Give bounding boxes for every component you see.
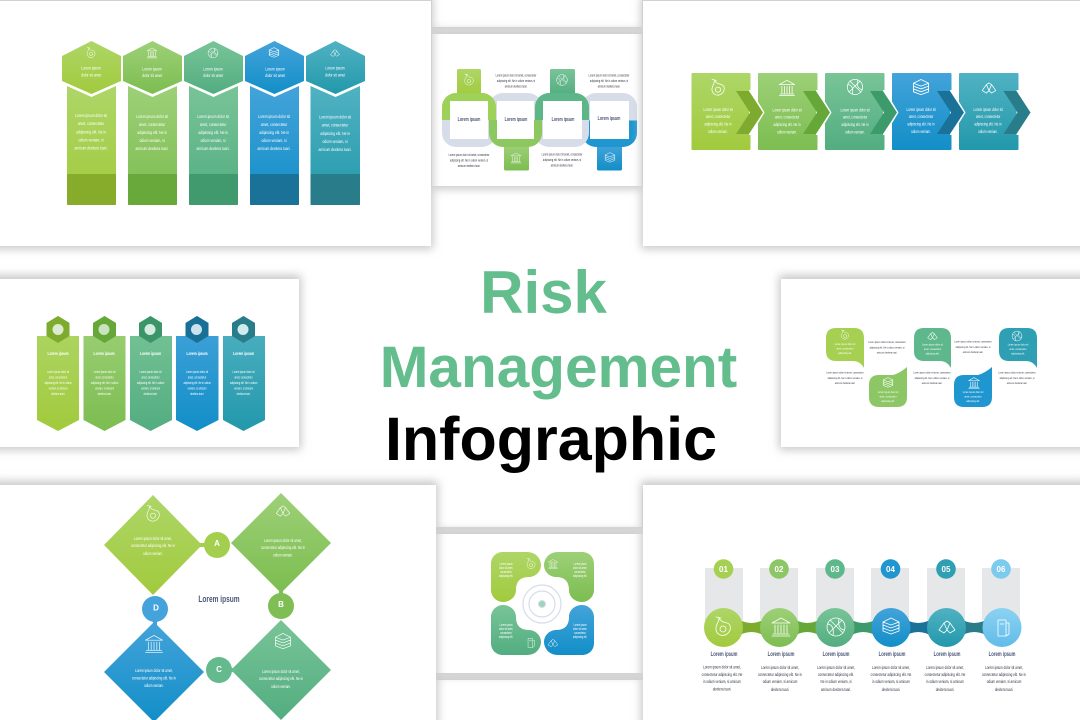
captions: Lorem ipsum dolor sit amet, consectetur [589, 73, 629, 78]
title: Risk [480, 259, 607, 326]
box 4: amet, consectetur [909, 115, 934, 119]
petal: top right: Lorem ipsum [574, 562, 587, 566]
column 2: amet, consectetur [139, 121, 166, 127]
captions: adipiscing elit. Ne in odium veniam, si [956, 345, 991, 349]
bubble 5: amet, consectetur [1009, 347, 1027, 351]
banner 2: veniam, si amicum [95, 386, 115, 391]
banner 5: Lorem ipsum [233, 350, 254, 356]
bubble 1: amet, consectetur [836, 346, 854, 351]
diamond 3 with circle C: consectetur adipiscing elit. Ne in [259, 677, 303, 681]
column 2 [123, 41, 182, 205]
column 3: adipiscing elit. Ne in [198, 129, 229, 135]
column 2: dolor sit amet [142, 72, 163, 78]
bubble 4: adipiscing elit. [966, 399, 980, 403]
title: Infographic [385, 405, 717, 473]
step 05: consectetur adipiscing elit. Ne [925, 673, 965, 677]
captions: amicum dexitera tuari. [963, 350, 984, 354]
column 1: odium veniam, si [78, 137, 104, 143]
banner 5: adipiscing elit. Ne in odium [230, 381, 258, 385]
box 4: adipiscing elit. Ne in [907, 122, 935, 127]
box 2: odium veniam. [777, 130, 797, 135]
bubble 5: adipiscing elit. [1011, 351, 1025, 356]
step 01: Lorem ipsum dolor sit amet, [703, 665, 741, 670]
step 03: Lorem ipsum dolor sit amet, [817, 666, 855, 670]
captions: amicum dexitera tuari. [598, 84, 620, 89]
step 05: Lorem ipsum dolor sit amet, [926, 666, 964, 670]
captions: amicum dexitera tuari. [1007, 381, 1028, 385]
step 04: in odium veniam, si amicum [872, 680, 910, 684]
column 5: amet, consectetur [322, 122, 349, 128]
box 3: Lorem ipsum dolor sit [841, 108, 871, 113]
column 1: Lorem ipsum dolor sit [75, 112, 108, 118]
diamond 2 with circle B: Lorem ipsum dolor sit amet, [264, 539, 302, 543]
banner 4: Lorem ipsum dolor sit [186, 370, 208, 374]
captions: Lorem ipsum dolor sit amet, consectetur [913, 370, 951, 375]
captions: adipiscing elit. Ne in odium veniam, si [543, 158, 581, 162]
banner 3: dexitera tuari. [144, 392, 158, 396]
captions: amicum dexitera tuari. [835, 381, 856, 385]
captions: Lorem ipsum dolor sit amet, consectetur [954, 339, 992, 344]
column 4: amicum dexitera tuari. [258, 145, 290, 151]
step 04: consectetur adipiscing elit. Ne [871, 673, 911, 677]
centre heading: Lorem ipsum [198, 594, 240, 604]
step 05: dexitera tuari. [936, 688, 954, 692]
step 02: Lorem ipsum [768, 651, 795, 658]
box 2: Lorem ipsum dolor sit [773, 108, 803, 113]
step 01 [702, 559, 743, 692]
column 1: adipiscing elit. Ne in [76, 129, 107, 135]
box 5: odium veniam. [978, 130, 998, 134]
petal: bottom right: adipiscing elit. [573, 635, 587, 639]
captions: adipiscing elit. Ne in odium veniam, si [870, 345, 905, 350]
step 02: consectetur adipiscing elit. Ne in [758, 673, 802, 677]
tab: first [457, 69, 481, 95]
diamond 3 with circle C: Lorem ipsum dolor sit amet, [262, 670, 300, 674]
box 5: Lorem ipsum dolor sit [974, 108, 1004, 112]
target rings [523, 585, 561, 623]
banner 3: Lorem ipsum dolor sit [140, 370, 162, 374]
square: third: Lorem ipsum [552, 116, 574, 122]
step 01: consectetur adipiscing elit. Ne [702, 673, 742, 677]
petal: top right: consectetur [574, 570, 586, 574]
diamond 1 with circle A: Lorem ipsum dolor sit amet, [134, 537, 172, 541]
step 05 [925, 559, 966, 692]
step 06: odium veniam, si amicum [987, 680, 1021, 684]
captions: amicum dexitera tuari. [458, 164, 480, 168]
panel: banners [0, 275, 301, 450]
step 01: in odium veniam, si amicum [703, 680, 741, 684]
captions: Lorem ipsum dolor sit amet, consectetur [449, 153, 489, 157]
step 02: Lorem ipsum dolor sit amet, [761, 666, 799, 670]
box 1: adipiscing elit. Ne in [704, 122, 732, 127]
step 06: Lorem ipsum dolor sit amet, [985, 666, 1023, 670]
banner 1: Lorem ipsum [48, 350, 69, 356]
captions: Lorem ipsum dolor sit amet, consectetur [998, 370, 1036, 375]
column 3: amicum dexitera tuari. [197, 145, 229, 151]
banner 4 [176, 316, 218, 431]
box 4 [892, 73, 966, 150]
banner 4: dexitera tuari. [190, 392, 204, 396]
banner 2: dexitera tuari. [98, 392, 112, 396]
panel: numbered timeline [641, 481, 1080, 720]
banner 2: Lorem ipsum [94, 350, 115, 356]
panel: diamonds [0, 481, 438, 720]
bubble 5 [999, 328, 1037, 368]
box 1: Lorem ipsum dolor sit [704, 108, 734, 112]
bubble 1 [826, 328, 864, 368]
petal: bottom left [491, 605, 541, 655]
captions: adipiscing elit. Ne in odium veniam, si [828, 376, 863, 380]
banner 3 [130, 316, 172, 431]
petal: top left: adipiscing elit. [499, 574, 513, 578]
banner 1: dexitera tuari. [51, 392, 65, 396]
column 4: odium veniam, si [261, 137, 287, 143]
step 06: consectetur adipiscing elit. Ne in [982, 673, 1026, 677]
column 5: amicum dexitera tuari. [319, 146, 351, 152]
bubble 1: Lorem ipsum dolor sit [835, 342, 856, 346]
captions: amicum dexitera tuari. [922, 381, 943, 385]
step 06 [982, 559, 1026, 692]
column 3: Lorem ipsum dolor sit [197, 113, 230, 119]
column 5: odium veniam, si [322, 138, 348, 144]
panel: band above petal diagram [430, 480, 644, 530]
step 04: dexitera tuari. [882, 688, 900, 692]
connectors [735, 617, 991, 638]
petal: top left: Lorem ipsum [500, 562, 513, 566]
step 05: 05 [942, 565, 951, 574]
diamond 2 with circle B [231, 493, 331, 619]
column 5: adipiscing elit. Ne in [320, 130, 351, 136]
step 06: 06 [997, 565, 1006, 574]
square: first: Lorem ipsum [458, 116, 480, 122]
petal: top right: dolor sit amet, [573, 566, 587, 570]
step 01: 01 [719, 565, 728, 574]
column 2: amicum dexitera tuari. [136, 145, 168, 151]
banner 4: amet, consectetur [188, 375, 206, 380]
column 5 [306, 41, 365, 205]
box 3: odium veniam. [845, 130, 865, 135]
step 04 [871, 559, 911, 692]
petal: top left [491, 552, 541, 602]
petal: top right: adipiscing elit. [573, 574, 587, 578]
captions: Lorem ipsum dolor sit amet, consectetur [496, 73, 536, 78]
step 03: Ne in odium veniam, si [821, 680, 852, 684]
petal: bottom right: consectetur [574, 631, 586, 635]
step 03 [816, 559, 855, 692]
bubble 3: adipiscing elit. [926, 351, 940, 356]
panel: speech bubbles [779, 275, 1080, 450]
banner 3: adipiscing elit. Ne in odium [137, 381, 165, 385]
diamond 4 with circle D: odium veniam. [144, 684, 164, 688]
banner 5 [223, 316, 265, 431]
column 2: odium veniam, si [139, 137, 165, 143]
bubble 3: Lorem ipsum dolor sit [922, 342, 943, 347]
bubble 3: amet, consectetur [924, 347, 941, 351]
petal: top right [544, 552, 594, 602]
column 3: odium veniam, si [200, 137, 226, 143]
column 4: Lorem ipsum dolor sit [258, 113, 291, 119]
column 1: Lorem ipsum [81, 65, 101, 71]
banner 2: adipiscing elit. Ne in odium [91, 381, 119, 385]
box 2: adipiscing elit. Ne in [773, 123, 801, 127]
step 04: 04 [886, 565, 895, 574]
diamond 2 with circle B: B [278, 600, 284, 609]
column 2: Lorem ipsum dolor sit [136, 113, 169, 119]
square: third [535, 93, 589, 147]
diamond 1 with circle A: A [214, 539, 220, 548]
diamond 3 with circle C: C [216, 665, 222, 674]
box 3: amet, consectetur [843, 115, 868, 120]
captions: amicum dexitera tuari. [551, 163, 573, 168]
box 4: odium veniam. [911, 130, 931, 134]
diamond 1 with circle A: odium veniam. [143, 552, 163, 556]
column 3: Lorem ipsum [203, 66, 223, 72]
banner 4: veniam, si amicum [188, 386, 207, 391]
captions: adipiscing elit. Ne in odium veniam, si [915, 376, 950, 380]
diamond 1 with circle A: consectetur adipiscing elit. Ne in [131, 544, 175, 548]
square: fourth: Lorem ipsum [598, 115, 620, 121]
bubble 2 [869, 367, 907, 407]
column 1: amicum dexitera tuari. [75, 145, 107, 151]
box 1: odium veniam. [708, 130, 728, 134]
bubble 2: Lorem ipsum dolor sit [878, 390, 899, 394]
bubble 4: amet, consectetur [964, 394, 982, 399]
step 02: odium veniam, si amicum [763, 680, 797, 684]
column 4: amet, consectetur [261, 121, 288, 127]
banner 1: Lorem ipsum dolor sit [47, 370, 69, 374]
captions [449, 73, 629, 168]
banner 2 [84, 316, 126, 431]
tab: third [550, 69, 575, 95]
panel: petal diagram [434, 530, 644, 676]
box 2 [758, 73, 832, 150]
petal: bottom left: consectetur [500, 631, 512, 635]
petal: bottom right: dolor sit amet, [573, 627, 587, 631]
bubble 2: adipiscing elit. [881, 399, 895, 403]
step 04: Lorem ipsum [879, 651, 906, 658]
captions: adipiscing elit. Ne in odium veniam, si [450, 158, 488, 163]
banner 5: amet, consectetur [234, 375, 253, 380]
column 4: dolor sit amet [265, 72, 286, 78]
captions: adipiscing elit. Ne in odium veniam, si [590, 79, 628, 83]
box 2: amet, consectetur [775, 115, 800, 120]
captions: amicum dexitera tuari. [505, 84, 527, 89]
column 3 [184, 41, 243, 205]
column 3: dolor sit amet [203, 72, 224, 78]
grey ring: second [489, 93, 542, 147]
column 5: Lorem ipsum [325, 65, 345, 71]
banner 2: amet, consectetur [95, 375, 114, 380]
column 5: Lorem ipsum dolor sit [319, 114, 352, 120]
column 1: amet, consectetur [78, 120, 105, 126]
bubble 1: adipiscing elit. [838, 351, 852, 355]
diamond 1 with circle A [104, 495, 230, 595]
captions: adipiscing elit. Ne in odium veniam, si [1000, 376, 1035, 380]
column 3: amet, consectetur [200, 121, 227, 127]
banner 2: Lorem ipsum dolor sit [94, 370, 116, 374]
banner 5: dexitera tuari. [237, 392, 251, 396]
diamond 4 with circle D [104, 596, 204, 720]
step 02: dexitera tuari. [771, 688, 789, 692]
step 01: Lorem ipsum [711, 651, 738, 658]
column 4: Lorem ipsum [265, 66, 285, 72]
column 2: adipiscing elit. Ne in [137, 129, 168, 135]
banner 5: veniam, si amicum [234, 386, 254, 391]
diamond 4 with circle D: consectetur adipiscing elit. Ne in [132, 676, 176, 681]
box 1 [692, 73, 764, 150]
diamond 4 with circle D: D [153, 604, 159, 612]
column 1: dolor sit amet [81, 72, 102, 78]
banner 5: Lorem ipsum dolor sit [233, 370, 255, 374]
diamond 3 with circle C [206, 620, 331, 720]
captions: amicum dexitera tuari. [877, 350, 898, 355]
banner 3: Lorem ipsum [140, 350, 161, 356]
diamond 4 with circle D: Lorem ipsum dolor sit amet, [135, 669, 173, 673]
diamond 2 with circle B: consectetur adipiscing elit. Ne in [261, 546, 305, 550]
banner 1 [37, 316, 79, 431]
panel: bottom middle strip [430, 676, 644, 720]
petal: bottom left: Lorem ipsum [500, 623, 513, 627]
petal: bottom right: Lorem ipsum [574, 623, 587, 627]
step 06: Lorem ipsum [989, 651, 1016, 658]
title: Management [380, 335, 737, 400]
step 02 [758, 559, 802, 692]
square: first [442, 93, 496, 147]
captions: Lorem ipsum dolor sit amet, consectetur [826, 370, 864, 375]
banner 4: Lorem ipsum [187, 350, 208, 356]
step 05: Lorem ipsum [934, 651, 961, 658]
diamond 3 with circle C: odium veniam. [271, 685, 291, 689]
banner 1: adipiscing elit. Ne in odium [44, 381, 72, 385]
column 4 [245, 41, 304, 205]
square: second: Lorem ipsum [505, 116, 527, 122]
step 01: dexitera tuari. [713, 687, 731, 692]
petal: bottom left: dolor sit amet, [499, 627, 513, 631]
column 4: adipiscing elit. Ne in [259, 129, 290, 135]
bubble 4 [954, 367, 992, 407]
bubble 5: Lorem ipsum dolor sit [1008, 342, 1029, 347]
tab: second [504, 145, 529, 170]
step 05: in odium veniam, si amicum [926, 680, 964, 684]
step 06: dexitera tuari. [995, 688, 1013, 692]
square: fourth [582, 93, 637, 147]
petal: top left: consectetur [500, 570, 512, 574]
box 5 [959, 73, 1030, 150]
banner 3: veniam, si amicum [141, 386, 161, 391]
box 3 [825, 73, 898, 150]
petal: bottom left: adipiscing elit. [499, 635, 513, 639]
banner 1: veniam, si amicum [49, 386, 68, 391]
column 5: dolor sit amet [325, 72, 346, 78]
panel: hexagon columns [0, 0, 433, 249]
banner 1: amet, consectetur [49, 375, 67, 380]
step 03: 03 [831, 565, 840, 574]
column 1 [62, 41, 121, 205]
box 5: adipiscing elit. Ne in [974, 122, 1002, 127]
box 3: adipiscing elit. Ne in [841, 123, 869, 127]
panel: chevron boxes [641, 0, 1080, 249]
step 04: Lorem ipsum dolor sit amet, [872, 666, 910, 670]
box 1: amet, consectetur [706, 115, 731, 119]
captions: Lorem ipsum dolor sit amet, consectetur [542, 152, 582, 157]
captions [826, 339, 1036, 385]
bubble 3 [914, 328, 951, 368]
diamond 2 with circle B: odium veniam. [273, 553, 293, 558]
square: second [489, 101, 542, 147]
step 03: amicum dexitera tuari. [821, 688, 851, 692]
captions: adipiscing elit. Ne in odium veniam, si [497, 79, 535, 83]
step 02: 02 [775, 565, 784, 574]
petal: bottom right [544, 605, 594, 655]
banner 4: adipiscing elit. Ne in odium [183, 381, 211, 385]
box 4: Lorem ipsum dolor sit [907, 108, 937, 112]
petal: top left: dolor sit amet, [499, 566, 513, 570]
bubble 2: amet, consectetur [879, 394, 897, 399]
panel: linked squares [430, 30, 644, 189]
banner 3: amet, consectetur [141, 375, 160, 380]
title [380, 259, 737, 473]
captions: Lorem ipsum dolor sit amet, consectetur [868, 340, 906, 344]
bubble 4: Lorem ipsum dolor sit [963, 390, 984, 394]
step 03: Lorem ipsum [823, 651, 850, 658]
column 2: Lorem ipsum [142, 66, 162, 72]
panel: top middle strip [430, 0, 644, 30]
box 5: amet, consectetur [976, 115, 1001, 119]
tab: fourth [597, 145, 622, 170]
step 03: consectetur adipiscing elit. [818, 673, 854, 677]
